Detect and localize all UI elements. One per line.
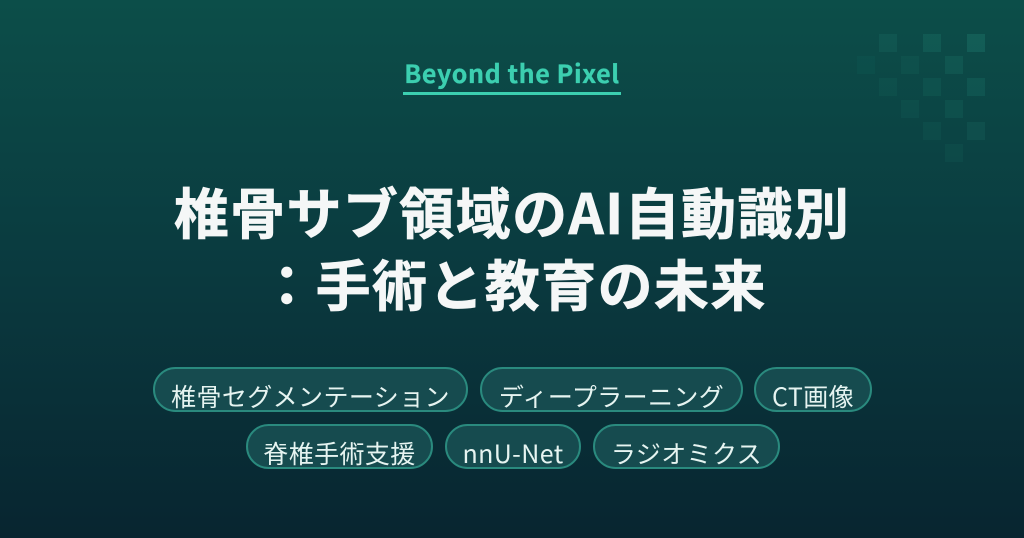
tag: 脊椎手術支援: 脊椎手術支援 bbox=[263, 435, 416, 471]
tag: ラジオミクス: ラジオミクス bbox=[611, 435, 762, 471]
keyword tags bbox=[153, 367, 872, 471]
title: 椎骨サブ領域のAI自動識別 bbox=[174, 170, 850, 250]
tag: 椎骨セグメンテーション: 椎骨セグメンテーション bbox=[171, 378, 450, 414]
title: ：手術と教育の未来 bbox=[259, 242, 767, 322]
tag: CT画像 bbox=[754, 367, 872, 412]
tag: 脊椎手術支援 bbox=[246, 424, 433, 469]
decorative pixel grid icon bbox=[879, 34, 985, 140]
eyebrow label: Beyond the Pixel: Beyond the Pixel bbox=[404, 55, 620, 91]
tag: ラジオミクス bbox=[593, 424, 780, 469]
title bbox=[174, 170, 850, 322]
tag: ディープラーニング bbox=[480, 367, 743, 412]
tag: nnU-Net bbox=[445, 424, 581, 469]
tag: ディープラーニング: ディープラーニング bbox=[499, 378, 724, 414]
tag: 椎骨セグメンテーション bbox=[153, 367, 468, 412]
tag: CT画像: CT画像 bbox=[772, 378, 854, 414]
tag: nnU-Net: nnU-Net bbox=[462, 435, 564, 471]
